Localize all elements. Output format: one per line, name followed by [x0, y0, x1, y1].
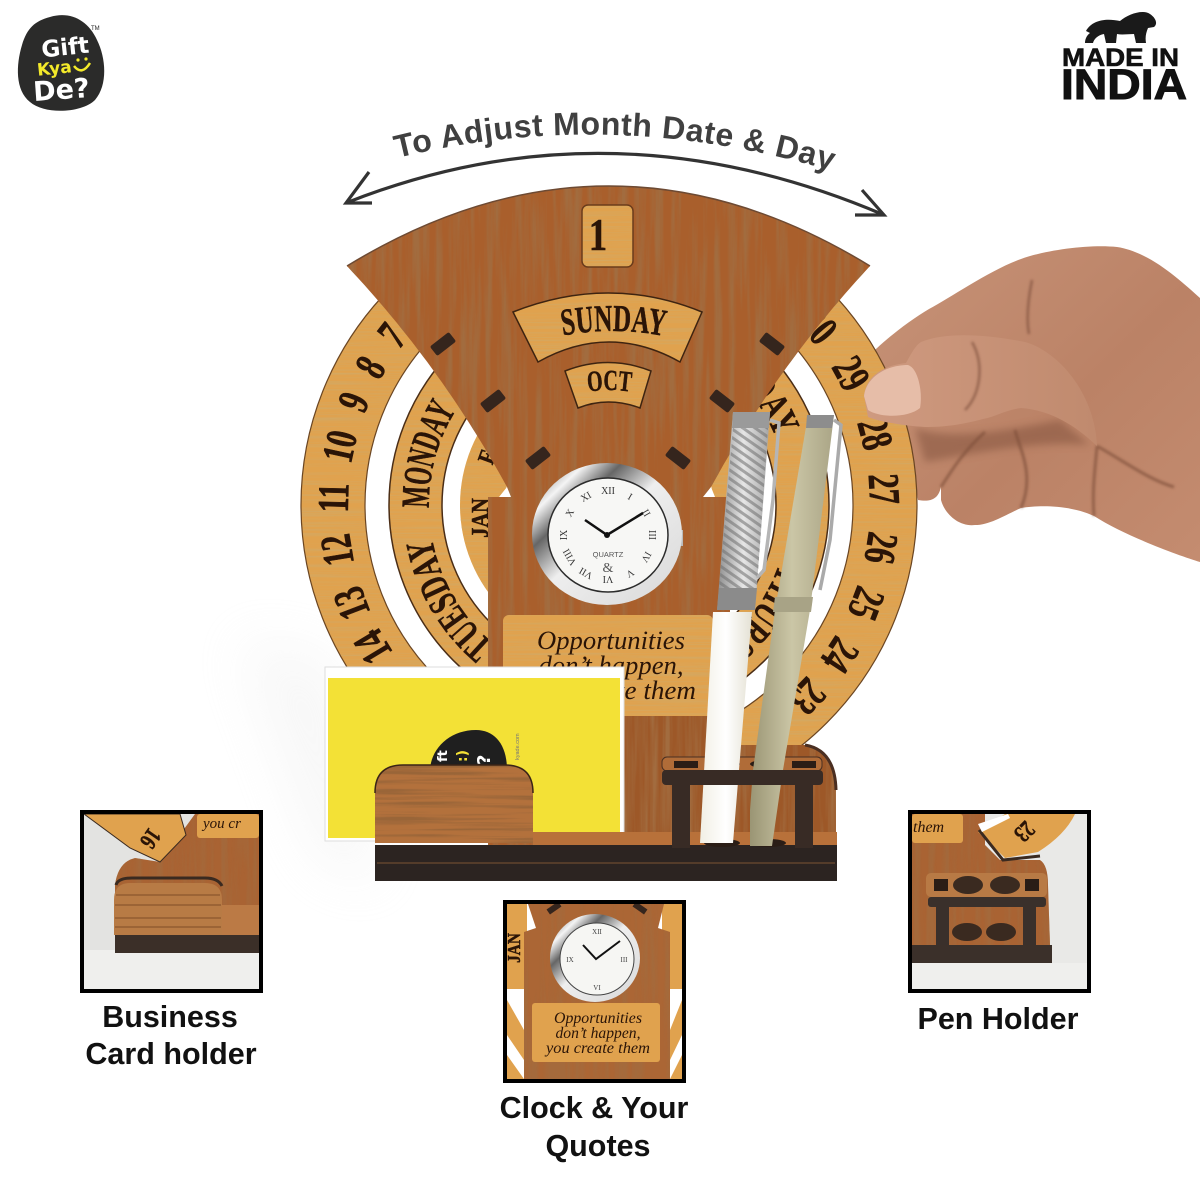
inset clock numerals: XII: [592, 928, 603, 936]
hand: back of hand and fingers: [875, 246, 1200, 562]
window: date: 1: [589, 210, 607, 261]
badge: Made in India: [1061, 12, 1187, 109]
inset: business card holder: 16: [134, 823, 167, 854]
clock numerals: V: [623, 566, 636, 580]
inset clock numerals: III: [620, 956, 628, 964]
date numbers: 28: [847, 413, 902, 455]
wheel: day ring: [388, 370, 830, 678]
label: Business Card holder: Card holder: [85, 1037, 257, 1071]
label: Clock & Your Quotes: Quotes: [545, 1129, 651, 1163]
day names: TUESDAY: [406, 542, 488, 664]
clock numerals: XI: [579, 490, 594, 505]
body: wooden fan and stem: [340, 180, 880, 850]
date numbers: 25: [837, 580, 894, 627]
inset: clock and quotes: don’t happen,: [556, 1025, 640, 1042]
pen: white with silver cap: [700, 412, 779, 843]
clock numerals: I: [626, 492, 634, 503]
inset: clock and quotes: JAN: [504, 933, 524, 963]
card logo: ft: [436, 750, 451, 762]
plaque: quote: Opportunities: [537, 626, 685, 655]
inset: pen holder: them: [913, 819, 944, 836]
date numbers: 23: [779, 668, 835, 724]
date numbers: 29: [822, 349, 879, 399]
date numbers: 14: [345, 621, 402, 672]
inset: clock and quotes: [504, 902, 684, 1081]
inset clock numerals: [566, 928, 628, 992]
badge: Made in India: INDIA: [1061, 61, 1187, 109]
pen holder back of plate: [662, 757, 822, 847]
clock numerals: III: [646, 530, 657, 540]
date numbers: 7: [368, 315, 416, 357]
inset: business card holder: you cr: [201, 816, 241, 832]
date numbers: 12: [311, 531, 364, 569]
logo: Gift Kya De: TM: [91, 26, 100, 32]
label: Clock & Your Quotes: Clock & Your: [500, 1091, 688, 1125]
window: date: [581, 204, 634, 268]
clock: &: [603, 561, 614, 576]
window: day: SUNDAY: [561, 306, 668, 336]
date numbers: 26: [854, 529, 907, 567]
date numbers: 27: [858, 472, 909, 506]
clock numerals: VII: [577, 564, 595, 581]
inset: pen holder: [910, 812, 1089, 991]
logo: Gift Kya De: De?: [32, 73, 91, 108]
date numbers: 10: [313, 426, 367, 467]
inset: clock and quotes: Opportunities: [554, 1010, 642, 1027]
clock: [532, 463, 683, 605]
date numbers: [309, 299, 909, 724]
clock numerals: II: [639, 508, 652, 519]
window: month: OCT: [588, 370, 633, 392]
plaque: quote: [503, 615, 713, 716]
clock numerals: XII: [601, 486, 615, 497]
inset clock numerals: IX: [566, 956, 574, 964]
date numbers: 9: [329, 386, 380, 418]
clock numerals: VIII: [561, 547, 579, 567]
label: Business Card holder: Business: [102, 1000, 238, 1034]
hand: thumb: [864, 280, 1097, 446]
card holder front: [372, 762, 537, 846]
clock numerals: VI: [603, 573, 613, 584]
plaque: quote: you create them: [521, 676, 696, 705]
base: [375, 832, 837, 881]
card logo: ?: [474, 755, 495, 765]
inset: clock and quotes: you create them: [544, 1040, 650, 1057]
clock numerals: IV: [638, 549, 653, 565]
wheel: month ring: F: [472, 447, 502, 467]
inset: pen holder: 23: [1009, 816, 1041, 848]
card logo: :): [455, 750, 471, 762]
date numbers: 13: [324, 580, 380, 626]
plaque: quote: don’t happen,: [538, 651, 684, 680]
date numbers: 30: [790, 299, 847, 354]
clock hands: [585, 513, 643, 535]
heading: To Adjust Month Date & Day: To Adjust Month Date & Day: [392, 112, 836, 174]
pen: gold: [750, 415, 841, 846]
clock numerals: IX: [559, 529, 570, 540]
business card: [325, 667, 624, 841]
back panel shoulder: [620, 714, 840, 836]
wheel: month ring: JAN: [466, 498, 493, 538]
label: Clock & Your Quotes: [500, 1091, 688, 1163]
inset clock numerals: VI: [593, 984, 601, 992]
day names: THURSDAY: [748, 568, 782, 658]
date numbers: 24: [811, 629, 868, 681]
clock: QUARTZ: [593, 550, 624, 559]
logo: Gift Kya De: [18, 15, 104, 111]
label: Pen Holder: Pen Holder: [917, 1002, 1079, 1036]
window: month: [564, 362, 652, 409]
day names: [402, 384, 800, 664]
clock numerals: X: [564, 507, 577, 519]
pen holder front: [662, 770, 823, 848]
card logo: kyade.com: [515, 733, 521, 760]
card logo: [430, 730, 521, 770]
day names: SATURDAY: [760, 384, 800, 434]
clock numerals: [559, 486, 657, 584]
logo: Gift Kya De: Gift: [40, 33, 90, 63]
badge: Made in India: MADE IN: [1062, 44, 1179, 72]
logo: Gift Kya De: Kya: [36, 57, 73, 81]
label: Business Card holder: [85, 1000, 257, 1071]
arrow: adjust direction: [346, 153, 884, 215]
date numbers: 11: [309, 483, 359, 513]
day names: MONDAY: [402, 397, 454, 508]
wheel: month ring: [460, 436, 730, 592]
inset: business card holder: [82, 812, 261, 991]
tab slots: [430, 332, 785, 470]
wheel: date ring: [300, 300, 918, 745]
window: day: [512, 292, 703, 363]
date numbers: 8: [346, 349, 396, 386]
